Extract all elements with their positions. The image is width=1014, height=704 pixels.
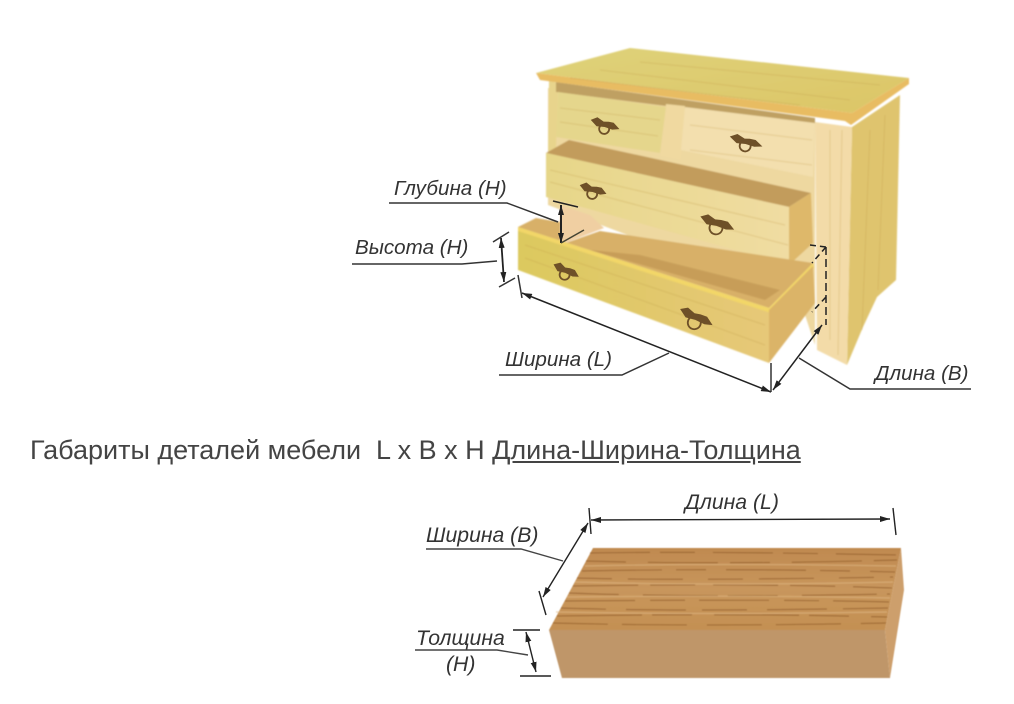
carcass front <box>548 88 815 345</box>
handle bottom left <box>550 261 581 284</box>
label: board width: Ширина (В) <box>426 524 538 547</box>
divider between top drawers <box>660 104 685 160</box>
handle top right <box>727 133 764 155</box>
top drawer right <box>681 107 815 177</box>
label: height: Высота (Н) <box>355 236 468 259</box>
handle bottom right <box>675 305 715 335</box>
label: depth: Глубина (Н) <box>394 177 507 200</box>
dimension: board width <box>426 523 588 615</box>
label: thickness symbol: (Н) <box>446 653 475 676</box>
drawer handles <box>550 116 764 335</box>
board end face <box>885 548 904 678</box>
left post <box>548 80 558 152</box>
dimension: board thickness <box>415 630 551 676</box>
bottom drawer rim <box>518 227 814 313</box>
label: width: Ширина (L) <box>505 348 612 371</box>
gap under middle drawer <box>560 205 604 245</box>
bottom drawer front <box>518 227 769 363</box>
label: board length: Длина (L) <box>683 491 779 514</box>
figure: chest of drawers with dimension labels <box>352 47 971 393</box>
bottom drawer interior <box>518 218 813 308</box>
right side panel <box>847 95 900 365</box>
caption: Габариты деталей мебели L x B x H Длина-Ширина-Толщина <box>30 435 801 465</box>
bottom drawer side <box>769 266 815 363</box>
handle top left <box>588 116 621 137</box>
label: board thickness: Толщина <box>416 627 505 650</box>
wood grain <box>525 62 885 355</box>
top front edge <box>536 73 909 125</box>
middle drawer rim <box>546 153 812 212</box>
rail above top drawers <box>556 82 815 124</box>
chest body <box>518 48 909 365</box>
middle drawer front <box>546 153 789 265</box>
dimension: width <box>499 275 771 392</box>
top drawer left <box>556 92 666 153</box>
dimension: depth <box>389 201 584 243</box>
top surface <box>536 48 909 113</box>
handle middle left <box>577 181 608 202</box>
dimension: height <box>352 232 515 287</box>
middle drawer interior <box>546 140 811 207</box>
middle drawer end grain <box>789 193 813 265</box>
front post <box>815 122 852 365</box>
label: length: Длина (В) <box>873 362 969 385</box>
dimension: length <box>773 245 971 390</box>
board top face <box>549 548 904 678</box>
board front face <box>549 630 890 678</box>
handle middle right <box>697 213 736 239</box>
dimension: board length <box>589 508 896 535</box>
wood grain lines <box>553 552 899 625</box>
